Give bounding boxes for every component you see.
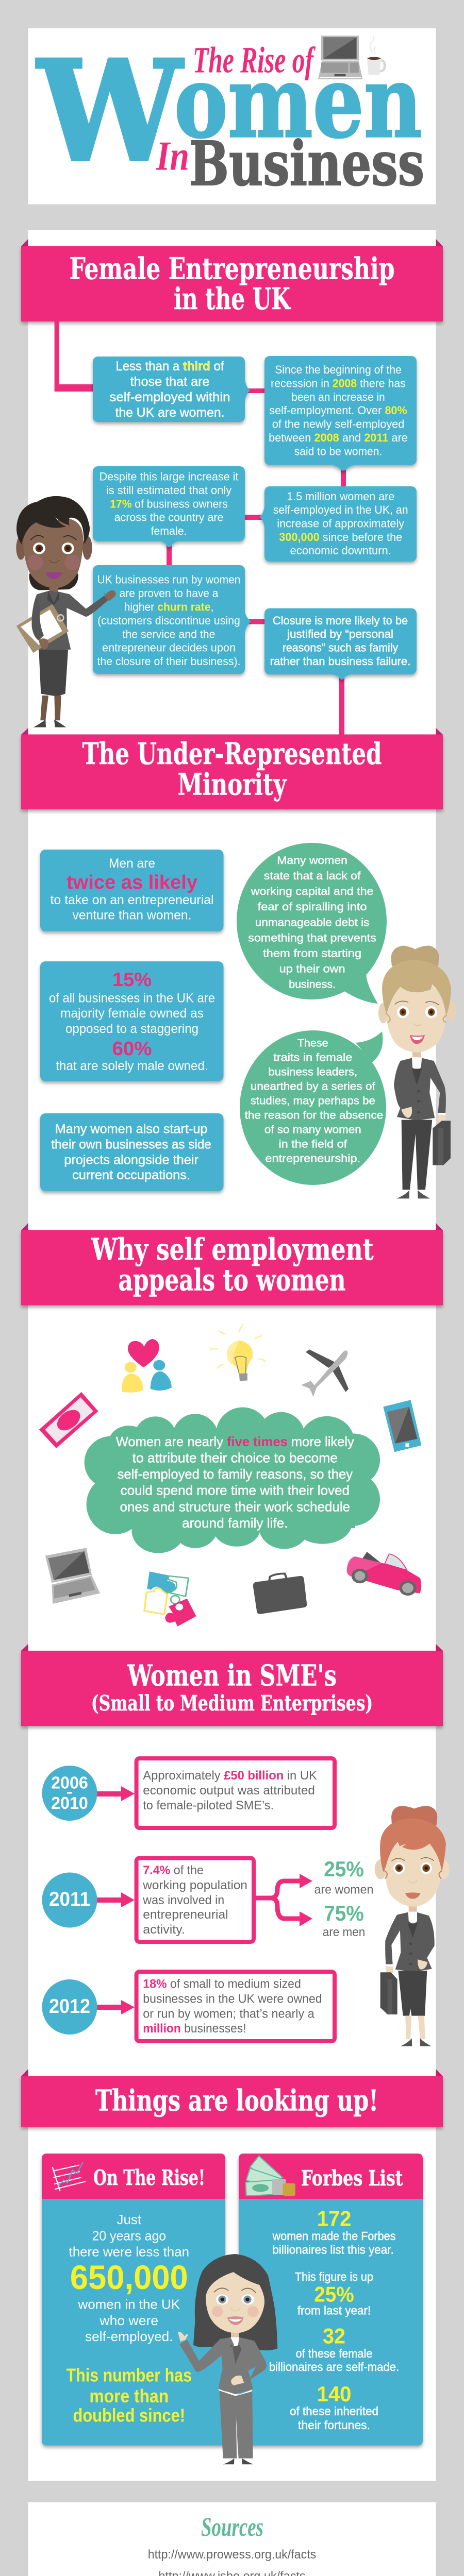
card: Forbes List: of these female [296,2347,372,2360]
timeline: 2012: or run by women; that’s nearly a [143,2007,314,2021]
box: twice as likely: venture than women. [72,908,192,923]
box: despite this large increase [93,466,245,547]
timeline: 2011: activity. [143,1923,185,1937]
card: Forbes List: of these inherited [290,2404,378,2418]
speech bubble: traits in female leaders: in the field of [278,1139,347,1150]
timeline: 2011: 7.4% of the [143,1863,204,1877]
icon: pink convertible car [347,1552,421,1596]
box: UK businesses run by women [93,565,251,674]
timeline: 2006-2010: to female-piloted SME’s. [143,1799,274,1812]
timeline: 2011: was involved in [142,1893,224,1907]
banner: Female Entrepreneurship in the UK: in the UK [174,281,291,316]
speech bubble: traits in female leaders: unearthed by a series of [251,1081,375,1093]
title words: The Rise of: The Rise of [193,40,316,81]
speech bubble: lack of working capital: Many women [277,855,347,867]
box: twice as likely [40,850,224,931]
speech bubble: lack of working capital: unmanageable debt is [255,917,369,928]
box: 15 percent female owned: 60% [112,1038,152,1060]
box: UK businesses run by women: higher churn rate, [124,601,213,613]
box: since the recession: self-employment. Over 80% [269,404,407,417]
speech bubble: lack of working capital: up their own [279,963,345,975]
box: twice as likely: to take on an entrepreneurial [51,893,213,907]
timeline: 2012: 2012 [49,1995,90,2018]
icon: banknote [39,1392,98,1448]
box: 1.5 million women: 1.5 million women are [287,490,394,503]
card: On The Rise: On The Rise! [93,2165,205,2190]
box: less than a third: Less than a third of [115,359,224,374]
box: UK businesses run by women: UK businesses run by women [97,573,240,586]
panel: title [28,28,436,204]
timeline: 2006-2010 [42,1758,335,1828]
speech bubble: lack of working capital: state that a lack of [264,870,361,882]
card: Forbes List: This figure is up [295,2270,373,2283]
connector lines: entrepreneurship flow [55,321,346,735]
box: UK businesses run by women: (customers discontinue using [97,614,240,627]
box: closure is more likely: justified by “personal [287,628,393,640]
banner: Female Entrepreneurship in the UK [21,239,443,321]
box: since the recession: of the newly self-employed [272,418,404,431]
box: 1.5 million women: self-employed in the UK, an [273,503,408,516]
box: 1.5 million women: 300,000 since before the [279,531,402,544]
cloud: five times more likely: Women are nearly five times more likely [116,1434,354,1449]
timeline: 2006-2010: 2010 [51,1793,88,1812]
panel: sources [28,2502,436,2576]
box: side projects: current occupations. [72,1168,190,1182]
card: On The Rise: This number has [67,2364,192,2385]
card: On The Rise [42,2154,225,2445]
box: closure is more likely: Closure is more likely to be [273,614,408,627]
speech bubble: traits in female leaders: traits in female [273,1052,352,1063]
speech bubble: lack of working capital [237,843,387,1004]
box: UK businesses run by women: the closure of their business). [97,655,240,668]
timeline: 2012: 18% of small to medium sized [143,1977,301,1991]
timeline: 2006-2010: Approximately £50 billion in UK [143,1769,317,1783]
card: On The Rise: Just [117,2212,142,2227]
box: despite this large increase: female. [151,524,187,537]
speech bubble: traits in female leaders: These [297,1038,328,1049]
character: blonde woman with briefcase [378,945,456,1198]
box: less than a third: self-employed within [109,390,230,404]
card: Forbes List: their fortunes. [298,2418,370,2432]
card: Forbes List: 25% [314,2282,354,2306]
speech bubble: lack of working capital: business. [289,979,336,990]
box: 1.5 million women: increase of approximately [277,517,404,530]
box: 15 percent female owned: of all businesses in the UK are [49,991,215,1005]
icon: heart and people [122,1339,172,1393]
box: twice as likely: Men are [109,856,155,871]
icon: coffee mug [367,36,385,75]
card: Forbes List: 32 [323,2324,345,2348]
box: UK businesses run by women: are proven to have a [120,587,219,600]
source links: http://www.prowess.org.uk/facts [148,2548,316,2562]
box: twice as likely: twice as likely [67,872,197,893]
box: despite this large increase: Despite this large increase it [100,470,238,483]
card: On The Rise: 20 years ago [92,2228,166,2243]
heading: Sources: Sources [201,2513,263,2542]
speech bubble: lack of working capital: fear of spiralling into [258,901,367,913]
source links [103,2548,361,2576]
box: 15 percent female owned: opposed to a staggering [65,1022,198,1036]
card: On The Rise: doubled since! [73,2405,185,2426]
banner: Things are looking up [21,2069,443,2127]
speech bubble: lack of working capital: working capital and the [251,886,373,897]
box: since the recession [264,356,417,471]
card: On The Rise: who were [99,2313,158,2328]
box: 1.5 million women: economic downturn. [290,544,391,557]
icon: airplane [301,1349,349,1397]
banner: The Under-Represented Minority: Minority [177,767,287,802]
cloud: five times more likely [85,1408,380,1553]
card: Forbes List [239,2154,423,2445]
speech bubble: traits in female leaders: of so many women [264,1124,361,1136]
card: On The Rise: there were less than [69,2244,189,2260]
cloud: five times more likely: to attribute their choice to become [132,1450,338,1466]
banner: Women in SMEs: Women in SME's [127,1658,337,1692]
speech bubble: traits in female leaders: business leaders, [268,1066,357,1078]
box: since the recession: recession in 2008 there has [271,377,406,389]
card: Forbes List: from last year! [297,2303,371,2317]
card: On The Rise: 650,000 [70,2258,188,2296]
box: UK businesses run by women: entrepreneur decides upon [102,641,236,654]
timeline: 2012: million businesses! [143,2022,246,2036]
timeline: 2012: businesses in the UK were owned [143,1992,322,2006]
timeline: 2006-2010: 2006 [51,1773,88,1792]
timeline: 2011 [42,1857,373,1942]
speech bubble: traits in female leaders [240,1030,386,1185]
box: despite this large increase: is still estimated that only [106,484,231,497]
card: Forbes List: women made the Forbes [272,2229,395,2243]
cloud: five times more likely: self-employed to family reasons, so they [118,1466,353,1482]
panel: main content background [28,230,436,2481]
box: since the recession: said to be women. [294,445,382,457]
box: 15 percent female owned: that are solely male owned. [56,1059,208,1073]
banner: Why self employment appeals to women: appeals to women [119,1263,345,1298]
box: despite this large increase: 17% of business owners [110,498,228,510]
banner: The Under-Represented Minority [21,728,443,809]
title word: In: In [156,134,189,179]
box: UK businesses run by women: the service and the [123,628,216,640]
speech bubble: traits in female leaders: the reason for the absence [245,1110,383,1121]
box: less than a third: those that are [130,375,209,389]
box: 1.5 million women [259,486,417,562]
box: 15 percent female owned: majority female owned as [60,1006,204,1021]
character: red-haired woman with briefcase [375,1806,450,2046]
speech bubble: lack of working capital: them from starting [263,948,361,959]
banner: Women in SMEs [21,1644,443,1726]
box: closure is more likely: rather than business failure. [270,655,410,668]
banner: Things are looking up: Things are looking up! [95,2083,378,2117]
box: side projects: projects alongside their [64,1153,198,1167]
character: woman with clipboard [16,496,116,727]
arrows: split to percentages [256,1874,312,1926]
speech bubble: lack of working capital: something that prevents [248,933,376,944]
box: side projects [40,1113,224,1191]
speech bubble: traits in female leaders: studies, may perhaps be [251,1095,375,1107]
box: 15 percent female owned: 15% [112,969,152,991]
speech bubble: traits in female leaders: entrepreneurship. [265,1153,360,1164]
icon: smartphone [383,1400,421,1452]
banner: Why self employment appeals to women: Why self employment [91,1232,374,1267]
card: On The Rise: women in the UK [78,2297,180,2312]
icon: rising line chart [53,2162,86,2191]
banner: Women in SMEs: (Small to Medium Enterprises) [91,1691,373,1716]
card: Forbes List: Forbes List [301,2166,403,2191]
card: On The Rise: more than [89,2385,169,2406]
card: Forbes List: 172 [317,2206,351,2230]
box: less than a third: the UK are women. [115,405,225,420]
character: dark-haired woman in grey suit [178,2254,277,2464]
box: less than a third [93,357,250,422]
timeline: 2011: entrepreneurial [143,1908,228,1922]
timeline: 2011: 75% [324,1901,364,1925]
timeline: 2011: are women [314,1883,373,1897]
banner: Why self employment appeals to women [21,1223,443,1306]
card: Forbes List: 140 [317,2382,352,2406]
cloud: five times more likely: could spend more time with their loved [121,1483,350,1498]
box: side projects: Many women also start-up [55,1122,207,1137]
box: closure is more likely [264,608,417,680]
box: since the recession: been an increase in [291,391,385,403]
icon: briefcase [253,1573,307,1614]
timeline: 2011: 2011 [49,1888,90,1910]
cloud: five times more likely: around family life. [182,1515,288,1531]
timeline: 2011: working population [142,1878,247,1892]
icon: puzzle pieces [144,1571,196,1626]
cloud: five times more likely: ones and structure their work schedule [120,1499,350,1514]
icon: laptop [318,36,362,79]
box: since the recession: between 2008 and 2011 are [269,431,408,444]
box: 15 percent female owned [40,961,224,1081]
timeline: 2011: 25% [324,1857,364,1881]
box: despite this large increase: across the country are [114,511,223,523]
box: since the recession: Since the beginning of the [275,363,402,376]
box: side projects: their own businesses as side [51,1138,211,1152]
icon: laptop tilted [45,1548,100,1604]
timeline: 2011: are men [323,1925,365,1939]
icon: money and coins [245,2156,295,2196]
timeline: 2012 [42,1972,335,2041]
card: Forbes List: billionaires are self-made. [269,2360,399,2374]
card: Forbes List: billionaires list this year. [272,2243,394,2257]
box: closure is more likely: reasons” such as family [283,641,398,654]
title word: Women W: W [36,30,184,193]
card: On The Rise: self-employed. [85,2329,173,2344]
icon: light bulb [209,1325,266,1381]
timeline: 2006-2010: economic output was attributed [143,1784,315,1798]
